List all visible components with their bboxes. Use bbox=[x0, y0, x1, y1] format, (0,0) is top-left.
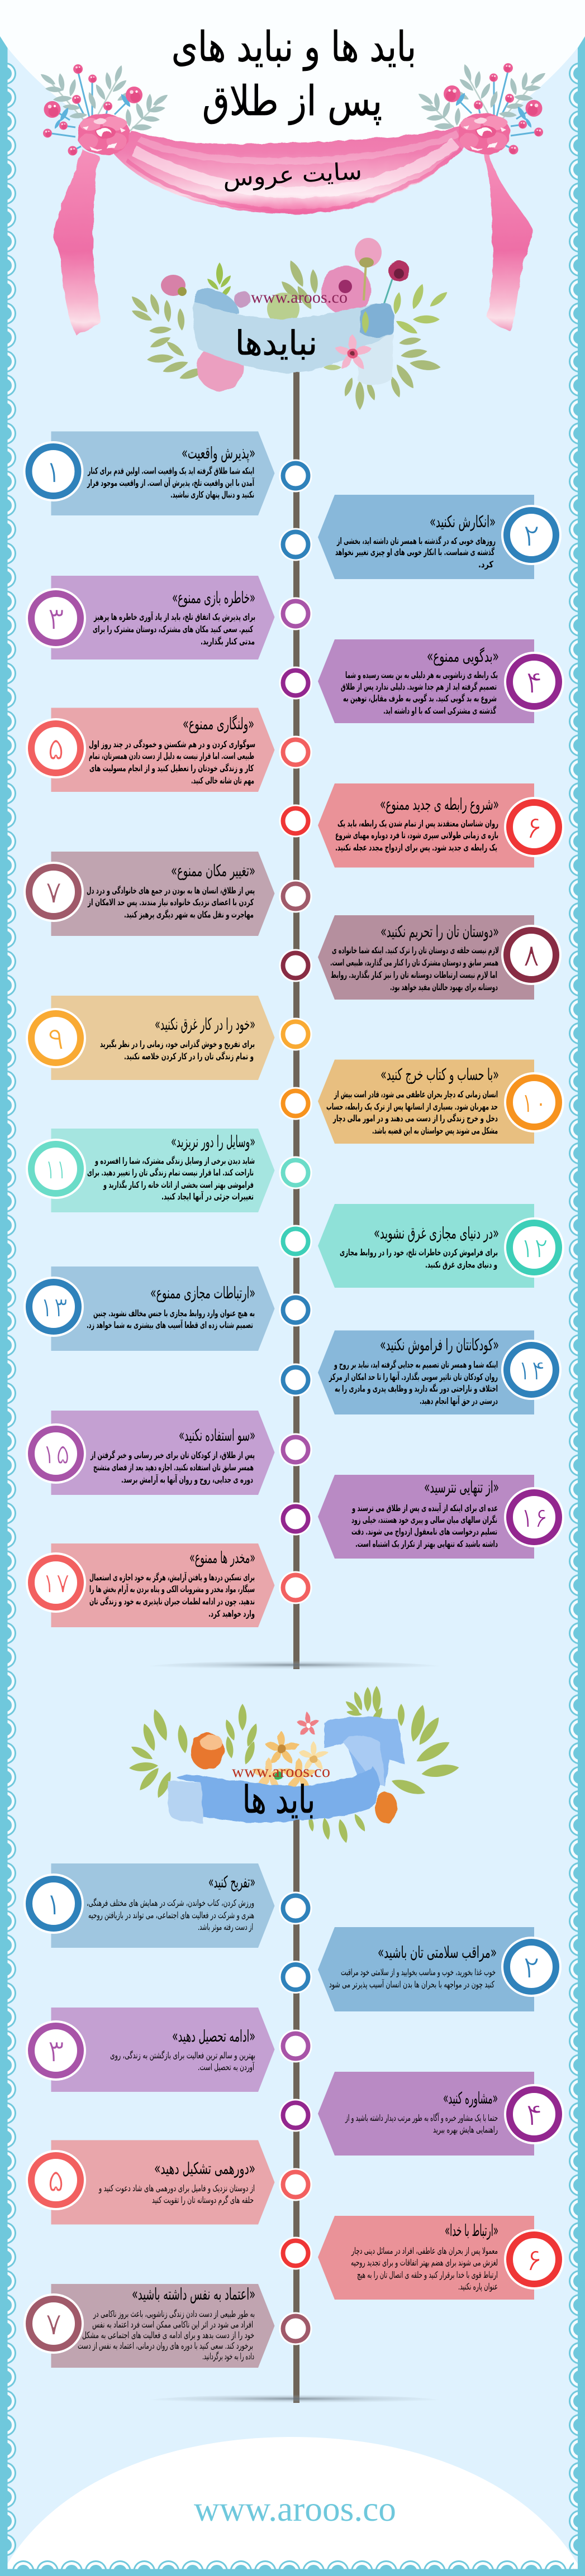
ground shadow under line one bbox=[138, 1661, 451, 1669]
panel: 12 virtual world: ۱۲ bbox=[520, 1232, 548, 1264]
panel: 7 moving bbox=[23, 852, 312, 936]
panel: 5 neglect: سوگواری کردن و در هم شکستن و خمودگی در چند روز اول bbox=[89, 739, 255, 750]
panel: 13 online relations: ۱۳ bbox=[40, 1291, 68, 1323]
panel: 5 neglect: ۵ bbox=[47, 731, 64, 767]
panel: 6 new relationship: ۶ bbox=[526, 810, 543, 846]
panel: do 6 faith: لغزش می شوند برای هضم بهتر اتفاقات و برای تجدید روحیه bbox=[351, 2257, 498, 2268]
panel: do 6 faith: عنوان پاره نکنید. bbox=[458, 2281, 498, 2292]
leaves bbox=[130, 259, 441, 410]
panel: 7 moving: «تغییر مکان ممنوع» bbox=[171, 861, 255, 880]
panel: 6 new relationship bbox=[279, 783, 564, 868]
panel: 13 online relations: تصمیم شتاب زده ای قطعا آسیب های بیشتری به شما خواهد زد. bbox=[87, 1319, 253, 1330]
panel: do 4 counselling: حتما با یک مشاور خبره و آگاه به طور مرتب دیدار داشته باشید و از bbox=[345, 2113, 498, 2124]
ribbon label: باید ها bbox=[242, 1778, 315, 1822]
rose left bbox=[78, 114, 130, 155]
panel: 10 spending: ۱۰ bbox=[521, 1087, 548, 1119]
panel: 3 memories: مدتی کنار بگذارید. bbox=[201, 636, 255, 647]
panel: 16 loneliness bbox=[279, 1475, 564, 1559]
panel: do 5 gatherings: «دورهمی تشکیل دهید» bbox=[154, 2159, 255, 2178]
panel: 1 acceptance bbox=[23, 431, 312, 515]
panel: do 7 confidence: داده را به خود برگردانید. bbox=[202, 2351, 254, 2362]
panel: do 2 health: کنید چون در مواجهه با بحران ها بدن انسان آسیب پذیرتر می شود bbox=[329, 1979, 494, 1990]
panel: do 1 recreation: هنری و شرکت در فعالیت های اجتماعی، می تواند در بازیافتن روحیه bbox=[88, 1910, 254, 1921]
panel: 10 spending bbox=[279, 1060, 564, 1144]
panel: 15 misuse: پس از طلاق، از کودکان تان برای خبر رسانی و خبر گرفتن از bbox=[90, 1450, 255, 1461]
panel: 8 friends: «دوستان تان را تحریم نکنید» bbox=[381, 922, 499, 941]
panel: do 5 gatherings: حلقه های گرم دوستانه تان را تقویت کنید bbox=[152, 2195, 254, 2206]
ribbon bbox=[168, 1781, 203, 1824]
panel: 17 drugs: «مخدر ها ممنوع» bbox=[189, 1548, 255, 1567]
flowers bbox=[267, 293, 299, 325]
panel: 11 belongings: فراموشی بهتر است بخشی از اثاث خانه را کنار بگذارید و bbox=[103, 1179, 254, 1190]
panel: do 7 confidence: «اعتماد به نفس داشته باشید» bbox=[132, 2285, 255, 2303]
panel: 3 memories: کنیم. سعی کنید مکان های مشترک، دوستان مشترک را برای bbox=[93, 624, 253, 634]
section banner: donts bbox=[130, 238, 449, 410]
panel: do 4 counselling: راهنمایی هایش بهره ببرید bbox=[433, 2124, 498, 2135]
panel: 7 moving: کردن با اعضای نزدیک خانواده نیاز مندند. پس حد الامکان از bbox=[87, 897, 254, 908]
panel: 11 belongings: ناراحت کند. اما قرار نیست تمام زندگی تان را تغییر دهید. برای bbox=[87, 1167, 254, 1178]
panel: 11 belongings: ۱۱ bbox=[45, 1153, 67, 1186]
panel: 12 virtual world: برای فراموش کردن خاطرات تلخ، خود را در روابط مجازی bbox=[340, 1247, 498, 1258]
flower spray left bbox=[39, 64, 169, 155]
panel: 15 misuse: ۱۵ bbox=[42, 1438, 70, 1470]
panel: 15 misuse: دوره ی جدایی، روح و روان آنها به آرامش برسد. bbox=[121, 1474, 253, 1485]
panel: 17 drugs bbox=[26, 1543, 312, 1627]
title: main heading: باید ها و نباید های bbox=[172, 23, 416, 71]
panel: do 4 counselling: ۴ bbox=[526, 2097, 543, 2133]
panel: 11 belongings bbox=[26, 1129, 312, 1212]
right drape tail bbox=[483, 152, 533, 331]
panel: 13 online relations: به هیچ عنوان وارد روابط مجازی با جنس مخالف نشوید. چنین bbox=[93, 1308, 255, 1319]
white bottom dome bbox=[4, 2437, 581, 2569]
illustration: pink draped sash with flowers bbox=[39, 63, 547, 335]
panel: 5 neglect bbox=[26, 708, 312, 792]
panel: 16 loneliness: عده ای برای اینکه از آینده ی پس از طلاق می ترسند و bbox=[351, 1502, 498, 1514]
main sash bbox=[114, 126, 464, 214]
panel: 11 belongings: شاید دیدن برخی از وسایل زندگی مشترک، شما را افسرده و bbox=[94, 1155, 255, 1166]
rose right bbox=[458, 113, 510, 155]
panel: 12 virtual world bbox=[279, 1204, 564, 1288]
panel: do 6 faith: ارتباط قوی با خدا برقرار کنید و حلقه ی اتصال تان را به هیچ bbox=[357, 2269, 498, 2281]
panel: do 3 education: ۳ bbox=[47, 2033, 64, 2070]
url text: www.aroos.co bbox=[251, 288, 348, 307]
timeline line: section two bbox=[293, 1804, 299, 2403]
panel: 4 badmouthing: گذشته ی مشترکی است که با او داشته اید. bbox=[383, 705, 496, 716]
panel: 4 badmouthing bbox=[279, 639, 564, 723]
panel: do 4 counselling bbox=[279, 2072, 564, 2156]
panel: 3 memories: ۳ bbox=[47, 601, 64, 637]
panel: 13 online relations bbox=[23, 1267, 312, 1351]
panel: do 7 confidence bbox=[23, 2284, 312, 2368]
flower spray right bbox=[417, 63, 547, 154]
title: main heading bbox=[172, 23, 416, 125]
panel: 16 loneliness: تسلیم درخواست های نامعقول ازدواج می شوند. دقت bbox=[351, 1526, 497, 1537]
panel: 2 denial: ۲ bbox=[523, 518, 540, 554]
panel: 14 children: درستی در حق آنها انجام دهید. bbox=[420, 1395, 498, 1406]
panel: 11 belongings: «وسایل را دور نریزید» bbox=[171, 1132, 255, 1151]
panel: 7 moving: مهاجرت و نقل مکان به شهر دیگری پرهیز کنید. bbox=[124, 909, 254, 920]
panel: do 2 health: ۲ bbox=[523, 1949, 540, 1986]
panel: do 1 recreation bbox=[23, 1863, 312, 1948]
panel: 13 online relations: «ارتباطات مجازی ممنوع» bbox=[150, 1283, 255, 1302]
panel: 11 belongings: تغییرات جزئی در آنها ایجاد کنید. bbox=[161, 1191, 254, 1202]
panel: 17 drugs: برای تسکین دردها و یافتن آرامش، هرگز به خود اجازه ی استعمال bbox=[89, 1571, 255, 1583]
panel: 9 work: برای تفریح و خوش گذرانی خود، زمانی را در نظر بگیرید bbox=[100, 1039, 255, 1049]
panel: 16 loneliness: داشته باشید که تنهایی بهتر از تکرار یک اشتباه است. bbox=[355, 1538, 498, 1549]
panel: do 2 health: خوب غذا بخورید، خوب و مناسب بخوابید و از سلامتی خود مراقبت bbox=[341, 1967, 496, 1978]
flowers bbox=[191, 1713, 397, 1823]
panel: do 3 education: «ادامه تحصیل دهید» bbox=[172, 2027, 255, 2045]
panel: do 6 faith: معمولا پس از بحران های عاطفی، افراد در مسائل دینی دچار bbox=[351, 2245, 498, 2257]
section banner: dos bbox=[129, 1686, 460, 1844]
panel: 3 memories: برای پذیرش یک اتفاق تلخ، باید از یاد آوری خاطره ها پرهیز bbox=[93, 611, 255, 623]
panel: 1 acceptance: آمدن با این واقعیت تلخ، پذیرش آن است. از واقعیت موجود فرار bbox=[87, 477, 254, 489]
panel: 15 misuse bbox=[26, 1411, 312, 1495]
footer website url: www.aroos.co bbox=[194, 2489, 396, 2529]
panel: 6 new relationship: یک رابطه ی جدید شود. پس برای ازدواج مجدد عجله نکنید. bbox=[335, 842, 497, 853]
timeline line: section one bbox=[293, 369, 299, 1669]
front pink flower bbox=[334, 334, 372, 371]
title: main heading: پس از طلاق bbox=[202, 77, 382, 125]
panel: 1 acceptance: نکنید و دنبال پنهان کاری نباشید. bbox=[170, 489, 254, 500]
panel: 1 acceptance: «پذیرش واقعیت» bbox=[182, 443, 255, 463]
left drape tail bbox=[54, 150, 101, 335]
panel: 9 work: و تمام زندگی تان را در کار کردن خلاصه نکنید. bbox=[124, 1051, 254, 1062]
panel: do 1 recreation: ورزش کردن، کتاب خواندن، شرکت در همایش های مختلف فرهنگی، bbox=[87, 1898, 254, 1909]
ribbon label: نبایدها bbox=[235, 324, 317, 363]
url text: www.aroos.co bbox=[232, 1762, 330, 1781]
panel: 4 badmouthing: «بدگویی ممنوع» bbox=[427, 647, 499, 666]
site name on sash: سایت عروس bbox=[222, 157, 363, 192]
panel: 9 work bbox=[26, 996, 312, 1080]
panel: do 7 confidence: برخورد کند. سعی کنید با دوره های روان درمانی، اعتماد به نفس از دست bbox=[78, 2340, 253, 2352]
panel: do 1 recreation: از دست رفته موثر باشد. bbox=[198, 1922, 253, 1933]
panel: 10 spending: «با حساب و کتاب خرج کنید» bbox=[381, 1065, 499, 1084]
panel: do 1 recreation: «تفریح کنید» bbox=[208, 1872, 255, 1891]
panel: 15 misuse: «سو استفاده نکنید» bbox=[179, 1426, 255, 1445]
panel: 14 children: «کودکانتان را فراموش نکنید» bbox=[380, 1335, 499, 1354]
panel: do 6 faith bbox=[279, 2216, 564, 2300]
panel: 17 drugs: وارد خواهید کرد. bbox=[208, 1608, 255, 1619]
panel: 17 drugs: ۱۷ bbox=[42, 1567, 70, 1599]
panel: 14 children bbox=[279, 1330, 562, 1414]
panel: do 7 confidence: به طور طبیعی از دست دادن زندگی زناشویی، باعث بروز ناکامی در bbox=[93, 2309, 255, 2320]
panel: 7 moving: پس از طلاق، انسان ها به بودن در جمع های خانوادگی و درد دل bbox=[87, 885, 255, 896]
panel: 5 neglect: کار و زندگی خودتان را تعطیل کنید و از انجام مسولیت های bbox=[89, 763, 254, 773]
panel: do 5 gatherings bbox=[26, 2140, 312, 2225]
panel: 9 work: ۹ bbox=[47, 1021, 64, 1057]
panel: 5 neglect: طبیعی است. اما قرار نیست به دلیل از دست دادن همسرتان، تمام bbox=[89, 751, 254, 761]
panel: do 3 education bbox=[26, 2008, 312, 2092]
ground shadow under line two bbox=[138, 2395, 451, 2403]
panel: 2 denial: «انکارش نکنید» bbox=[430, 512, 496, 531]
panel: 6 new relationship: «شروع رابطه ی جدید ممنوع» bbox=[380, 795, 499, 814]
panel: 14 children: ۱۴ bbox=[517, 1354, 545, 1387]
panel: do 5 gatherings: ۵ bbox=[47, 2163, 64, 2199]
panel: 15 misuse: همسر سابق تان استفاده نکنید. اجازه دهید بعد از فضای متشنج bbox=[93, 1462, 254, 1473]
panel: do 6 faith: ۶ bbox=[526, 2242, 543, 2278]
panel: 8 friends: دوستانه برای بهبود حالتان مفید خواهد بود. bbox=[390, 982, 498, 992]
panel: do 6 faith: «ارتباط با خدا» bbox=[445, 2221, 498, 2240]
panel: 1 acceptance: ۱ bbox=[45, 454, 62, 490]
panel: 1 acceptance: اینکه شما طلاق گرفته اید یک واقعیت است. اولین قدم برای کنار bbox=[87, 466, 254, 476]
panel: 7 moving: ۷ bbox=[45, 874, 62, 911]
panel: do 3 education: بهترین و سالم ترین فعالیت برای بازگشتن به زندگی، روی bbox=[110, 2050, 255, 2061]
panel: 12 virtual world: و دنیای مجازی غرق نکنید. bbox=[425, 1259, 497, 1270]
panel: 5 neglect: «ولنگاری ممنوع» bbox=[183, 714, 254, 733]
panel: 3 memories: «خاطره بازی ممنوع» bbox=[172, 588, 255, 607]
panel: 17 drugs: سیگار، مواد مخدر و مشروبات الکی و پناه بردن به آرام بخش ها را bbox=[89, 1583, 255, 1595]
panel: do 5 gatherings: از دوستان نزدیک و فامیل برای دورهمی های شاد دعوت کنید و bbox=[98, 2183, 255, 2194]
panel: 2 denial bbox=[279, 495, 562, 579]
panel: 9 work: «خود را در کار غرق نکنید» bbox=[155, 1015, 255, 1034]
panel: 4 badmouthing: ۴ bbox=[526, 665, 543, 701]
panel: 16 loneliness: ۱۶ bbox=[520, 1502, 548, 1534]
panel: do 7 confidence: افراد می شود در اثر این ناکامی ممکن است فرد اعتماد به نفس bbox=[92, 2319, 253, 2330]
panel: do 1 recreation: ۱ bbox=[45, 1886, 62, 1923]
leaves bbox=[129, 1686, 460, 1844]
panel: do 7 confidence: ۷ bbox=[45, 2306, 62, 2343]
white top curved backdrop bbox=[0, 0, 585, 184]
panel: 2 denial: کرد. bbox=[478, 559, 494, 570]
panel: 8 friends bbox=[279, 915, 562, 1000]
panel: 5 neglect: مهم تان شانه خالی کنید. bbox=[191, 775, 254, 786]
panel: 3 memories bbox=[26, 576, 312, 659]
ribbon bbox=[194, 288, 239, 321]
panel: 12 virtual world: «در دنیای مجازی غرق نشوید» bbox=[374, 1224, 499, 1242]
panel: do 2 health bbox=[279, 1927, 562, 2011]
panel: 8 friends: ۸ bbox=[523, 938, 540, 974]
panel: do 2 health: «مراقب سلامتی تان باشید» bbox=[378, 1943, 497, 1962]
panel: 10 spending: مشکل می شوند پس حواستان به این قضیه باشد. bbox=[372, 1125, 498, 1136]
panel: do 3 education: آوردن به تحصیل است. bbox=[198, 2062, 255, 2073]
panel: do 4 counselling: «مشاوره کنید» bbox=[443, 2088, 498, 2107]
panel: 17 drugs: ندهید. چون در ادامه لطمات جبران ناپذیری به خود و زندگی تان bbox=[89, 1596, 255, 1607]
panel: do 7 confidence: خود را از دست بدهد و برای ادامه ی فعالیت های اجتماعی به مشکل bbox=[82, 2330, 254, 2341]
panel: 16 loneliness: «از تنهایی نترسید» bbox=[424, 1478, 499, 1497]
